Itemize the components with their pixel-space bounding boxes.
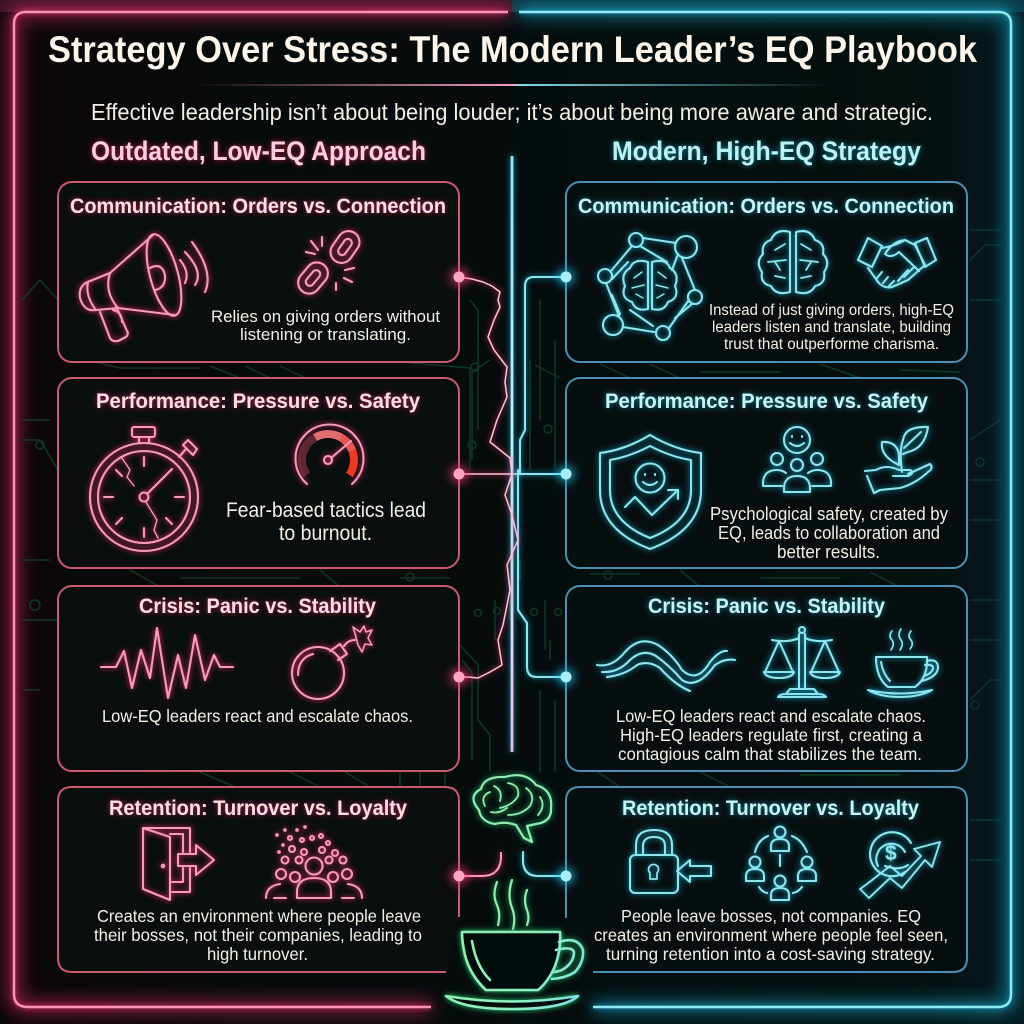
- icon: brain network: [598, 233, 702, 340]
- card text: Creates an environment where people leave: [97, 906, 421, 926]
- icon: central coffee cup: [446, 932, 583, 1009]
- card text: People leave bosses, not companies. EQ: [621, 906, 921, 926]
- icon: coffee cup: [868, 629, 938, 697]
- icon: connected team: [746, 826, 816, 900]
- card text: creates an environment where people feel seen,: [594, 925, 948, 945]
- icon: crowd leaving: [266, 826, 362, 898]
- panel: high-EQ performance: [566, 378, 967, 568]
- card text: listening or translating.: [240, 325, 411, 344]
- card text: leaders listen and translate, building: [712, 319, 951, 336]
- panel: low-EQ crisis: [58, 586, 459, 771]
- card text: [94, 906, 422, 964]
- icon: erratic pulse: [101, 628, 233, 698]
- column heading: low EQ: Outdated, Low-EQ Approach: [91, 136, 426, 166]
- icon: broken chain link: [294, 227, 364, 298]
- card frame: [58, 182, 459, 362]
- central divider line: [511, 156, 513, 752]
- card frame: [566, 378, 967, 568]
- card heading: Crisis: Panic vs. Stability: [648, 595, 885, 618]
- icon: plant in hand: [865, 427, 932, 493]
- card text: [709, 302, 954, 353]
- icon: megaphone: [80, 231, 208, 341]
- icon: lock with arrow: [630, 830, 711, 893]
- right margin traces: [970, 230, 1005, 860]
- card frame: [58, 586, 459, 771]
- card text: better results.: [777, 542, 880, 562]
- icon: balance scale: [764, 627, 840, 697]
- card text: High-EQ leaders regulate first, creating a: [620, 725, 922, 745]
- cyan connector nodes: [558, 269, 574, 884]
- card text: [226, 499, 426, 545]
- icon: central steam: [494, 880, 528, 929]
- card text: contagious calm that stabilizes the team.: [618, 744, 922, 764]
- card text: [710, 504, 948, 562]
- card text: Low-EQ leaders react and escalate chaos.: [616, 706, 926, 726]
- card text: Instead of just giving orders, high-EQ: [709, 302, 954, 319]
- panel: low-EQ performance: [58, 378, 459, 568]
- panel: high-EQ retention: [566, 787, 967, 972]
- card text: turning retention into a cost-saving strategy.: [606, 944, 935, 964]
- card frame: [566, 787, 967, 972]
- icon: exit door: [143, 828, 214, 900]
- panel: low-EQ retention: [58, 787, 459, 972]
- card heading: Retention: Turnover vs. Loyalty: [109, 797, 407, 820]
- icon: happy team: [763, 427, 831, 492]
- card text: Relies on giving orders without: [211, 307, 440, 326]
- icon: dollar and rising arrow: [860, 832, 940, 898]
- card heading: Retention: Turnover vs. Loyalty: [622, 797, 919, 820]
- subtitle: Effective leadership isn’t about being louder; it’s about being more aware and strategic.: [91, 99, 933, 125]
- panel: low-EQ communication: [58, 182, 459, 362]
- card heading: Performance: Pressure vs. Safety: [96, 390, 420, 413]
- cyan connectors: [512, 277, 566, 876]
- icon: central green brain: [473, 775, 551, 842]
- card text: [594, 906, 948, 964]
- card frame: [58, 787, 459, 972]
- card heading: Crisis: Panic vs. Stability: [139, 595, 376, 618]
- icon: brain: [759, 231, 827, 293]
- card text: [616, 706, 926, 764]
- card frame: [58, 378, 459, 568]
- outer frame: low-EQ side: [14, 12, 508, 1007]
- card text: high turnover.: [207, 944, 308, 964]
- card text: EQ, leads to collaboration and: [718, 523, 940, 543]
- circuit board traces: [22, 280, 960, 787]
- card text: Low-EQ leaders react and escalate chaos.: [102, 706, 413, 726]
- icon: shield with smile: [600, 435, 701, 549]
- outer frame: high-EQ side: [519, 12, 1011, 1007]
- card text: Psychological safety, created by: [710, 504, 948, 524]
- panel: high-EQ crisis: [566, 586, 967, 771]
- icon: calm waves: [597, 641, 735, 691]
- card text: to burnout.: [279, 522, 372, 545]
- panel: high-EQ communication: [566, 182, 967, 362]
- card text: Fear-based tactics lead: [226, 499, 426, 522]
- pink connector nodes: [451, 269, 467, 884]
- card heading: Performance: Pressure vs. Safety: [605, 390, 928, 413]
- card frame: [566, 182, 967, 362]
- card heading: Communication: Orders vs. Connection: [70, 195, 446, 218]
- card frame: [566, 586, 967, 771]
- card heading: Communication: Orders vs. Connection: [578, 195, 954, 218]
- icon: handshake: [858, 238, 936, 287]
- icon: dollar and rising arrow: $: [885, 842, 897, 865]
- card text: their bosses, not their companies, leading to: [94, 925, 422, 945]
- title: Strategy Over Stress: The Modern Leader’s EQ Playbook: [48, 29, 977, 70]
- pink lightning connectors: [459, 277, 518, 876]
- icon: pressure gauge: [296, 425, 364, 484]
- icon: cracked stopwatch: [90, 427, 198, 551]
- card text: [211, 307, 440, 344]
- card text: trust that outperforme charisma.: [724, 336, 939, 353]
- title divider: [195, 84, 830, 86]
- column heading: high EQ: Modern, High-EQ Strategy: [612, 136, 921, 166]
- icon: bomb: [292, 626, 372, 699]
